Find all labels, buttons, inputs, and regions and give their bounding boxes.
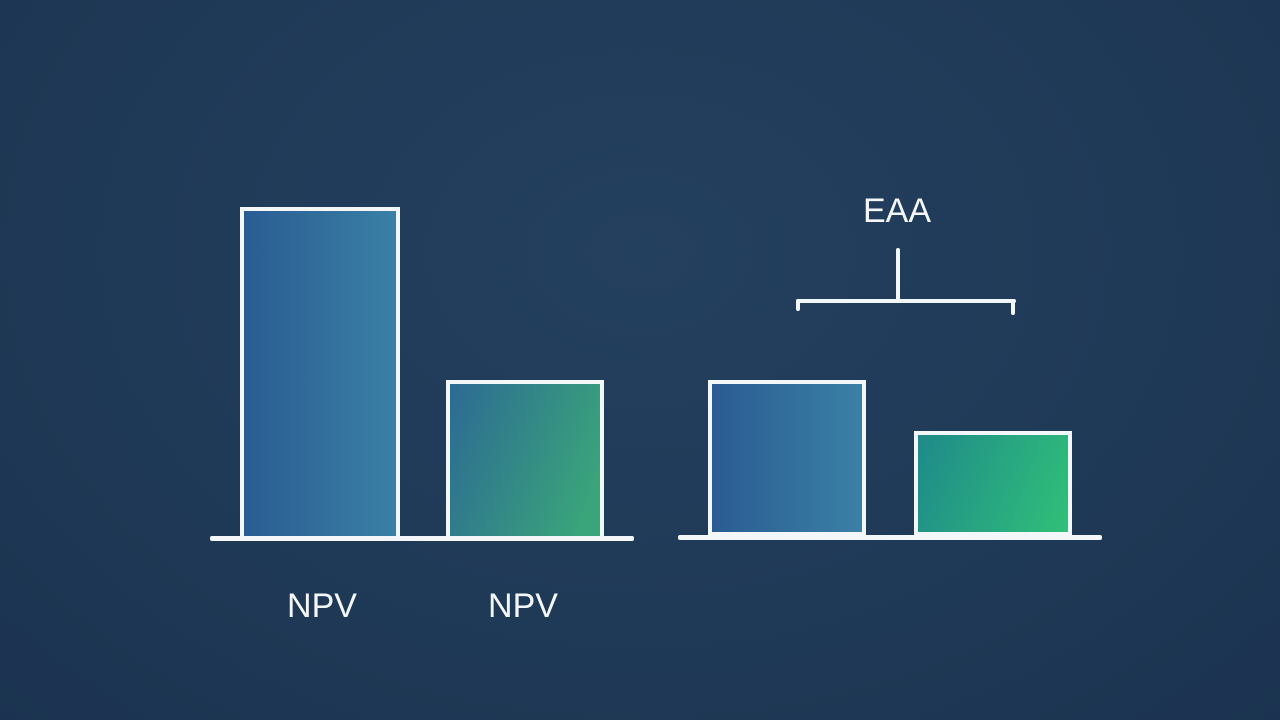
chart: NPV comparison: [210, 207, 634, 625]
chart: EAA comparison: [678, 192, 1102, 540]
baseline: [210, 536, 634, 541]
bar: NPV short: [446, 380, 604, 541]
label: EAA: EAA: [863, 192, 931, 230]
label: NPV 2: NPV: [488, 587, 558, 625]
label: NPV 1: NPV: [287, 587, 357, 625]
bar: EAA 2: [914, 431, 1072, 536]
bracket: [796, 248, 1016, 315]
bar: EAA 1: [708, 380, 866, 536]
bar: NPV tall: [240, 207, 400, 541]
baseline: [678, 535, 1102, 540]
